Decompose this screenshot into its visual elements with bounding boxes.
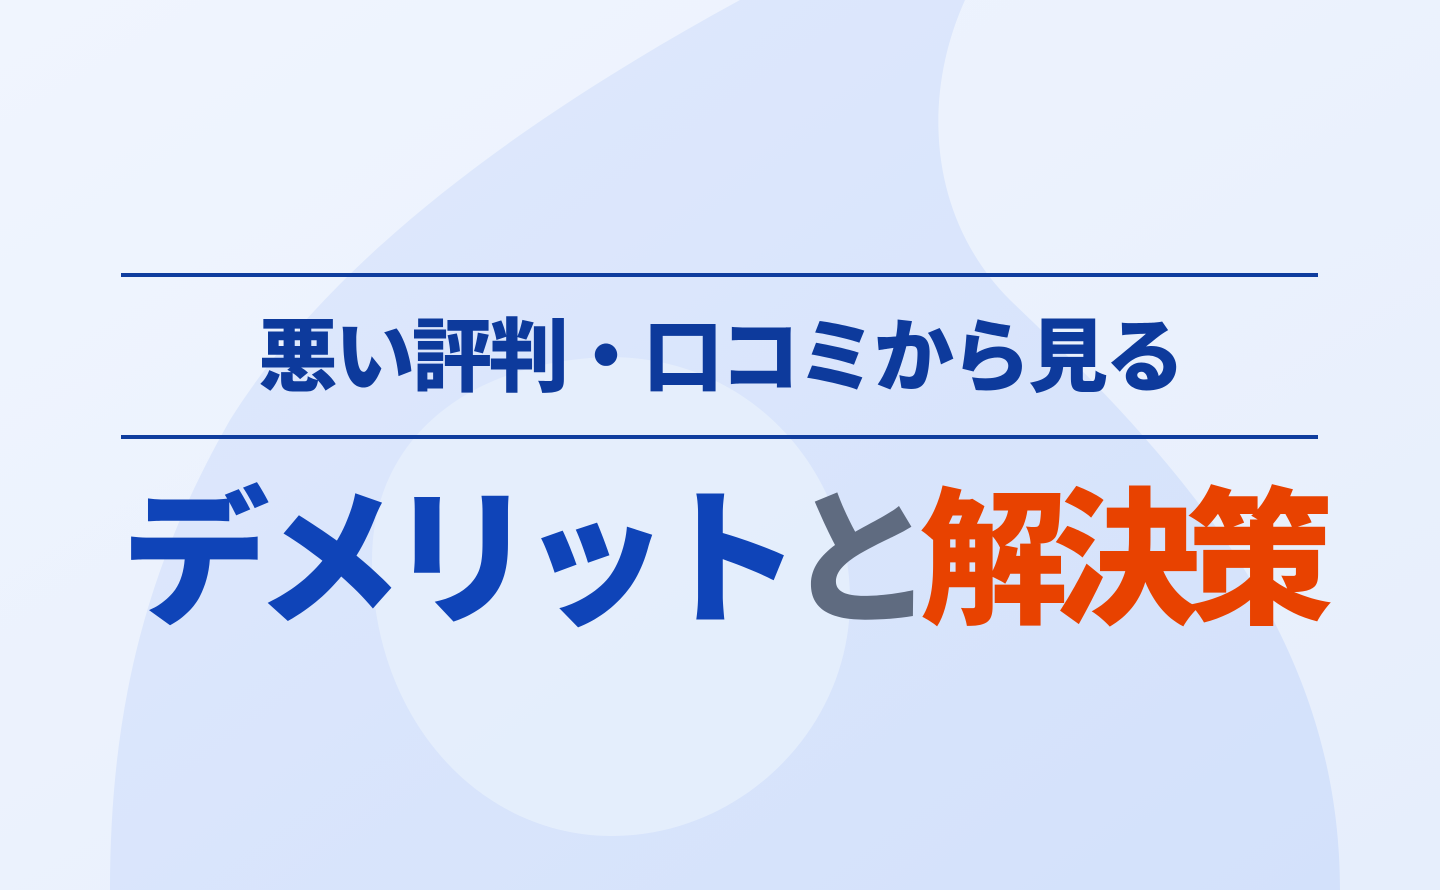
bottom rule [121, 435, 1318, 439]
top rule [121, 273, 1318, 277]
main title: デメリットと解決策 [122, 479, 1318, 644]
subtitle: 悪い評判・口コミから見る [258, 313, 1182, 402]
